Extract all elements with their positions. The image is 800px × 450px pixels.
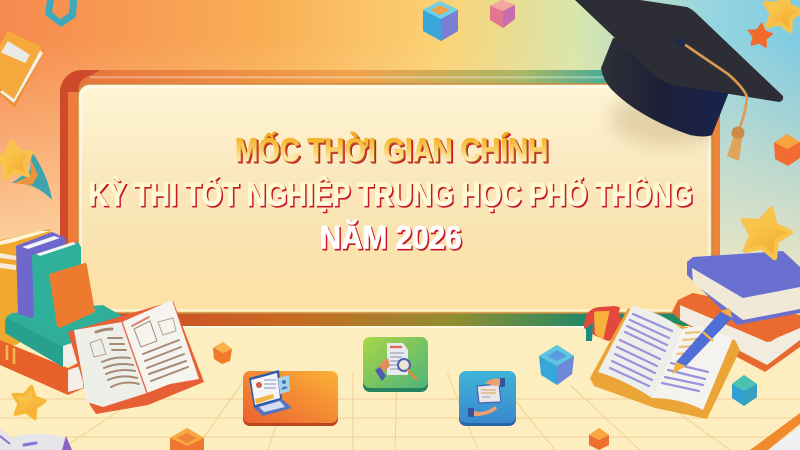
icon: teal hexagon ring bbox=[45, 0, 77, 27]
icon: small orange cube bbox=[213, 342, 232, 364]
teal book bbox=[32, 242, 81, 324]
yellow book bbox=[0, 229, 52, 345]
title line 1: MỐC THỜI GIAN CHÍNH bbox=[236, 133, 549, 169]
blue book bbox=[687, 251, 800, 325]
title line 1: MỐC THỜI GIAN CHÍNH bbox=[235, 132, 548, 168]
purple book bbox=[16, 232, 66, 318]
icon: open notebook with pen bbox=[590, 306, 740, 419]
floor grid bbox=[0, 372, 800, 450]
icon: yellow star on books bbox=[736, 203, 795, 260]
frame top edge bbox=[60, 70, 720, 326]
icon: laptop bbox=[249, 370, 292, 416]
frame left edge bbox=[60, 70, 100, 326]
main frame bbox=[60, 70, 730, 328]
title line 3: NĂM 2026 bbox=[320, 220, 462, 256]
title line 3: NĂM 2026 bbox=[321, 221, 463, 257]
icon: pink cube top bbox=[490, 0, 515, 28]
icon: yellow star bottom left bbox=[9, 383, 47, 420]
icon: graduation cap bbox=[575, 0, 783, 161]
title line 1: MỐC THỜI GIAN CHÍNH bbox=[237, 134, 550, 170]
icon: teal cube bbox=[732, 375, 757, 406]
icon: orange cube bottom bbox=[170, 428, 204, 450]
icon: document and magnifier bbox=[375, 343, 416, 381]
frame right edge bbox=[712, 100, 720, 313]
book tables bbox=[134, 321, 157, 347]
yellow star bbox=[760, 0, 800, 33]
orange star bbox=[747, 22, 773, 48]
icon: orange notebook top left bbox=[0, 31, 44, 108]
icon: book stack left bbox=[0, 229, 122, 395]
icon: stars top right bbox=[747, 0, 800, 48]
tile: blue handover bbox=[459, 371, 516, 426]
tassel bbox=[673, 37, 747, 161]
tile: green document search bbox=[363, 337, 428, 392]
icon: book stack right bbox=[672, 251, 800, 372]
teal base book bbox=[5, 305, 122, 367]
icon: orange cube right bbox=[774, 134, 800, 166]
frame bottom edge bbox=[60, 300, 720, 326]
orange book bbox=[672, 293, 800, 372]
title line 2: KỲ THI TỐT NGHIỆP TRUNG HỌC PHỔ THÔNG bbox=[89, 177, 693, 213]
icon: small orange cube bottom bbox=[589, 428, 609, 450]
orange base book bbox=[0, 340, 84, 395]
icon: corner book bottom right bbox=[750, 413, 800, 450]
notebook lines bbox=[610, 314, 708, 391]
cream panel bbox=[78, 84, 712, 313]
title bbox=[89, 132, 694, 257]
orange standing book bbox=[49, 263, 95, 328]
icon: blue cube top bbox=[423, 1, 458, 41]
icon: open book fragment bottom left bbox=[0, 428, 72, 450]
icon: blue cube bbox=[539, 345, 574, 385]
tile: orange laptop bbox=[243, 370, 338, 426]
icon: open book left bbox=[68, 300, 204, 414]
title line 2: KỲ THI TỐT NGHIỆP TRUNG HỌC PHỔ THÔNG bbox=[90, 178, 694, 214]
pen bbox=[672, 308, 732, 374]
icon: shooting star bbox=[0, 139, 52, 200]
cap shadow bbox=[606, 96, 712, 152]
icon: hands with certificate bbox=[468, 378, 505, 417]
icon: bookmark ribbon bbox=[584, 306, 622, 341]
book text lines bbox=[96, 317, 188, 387]
